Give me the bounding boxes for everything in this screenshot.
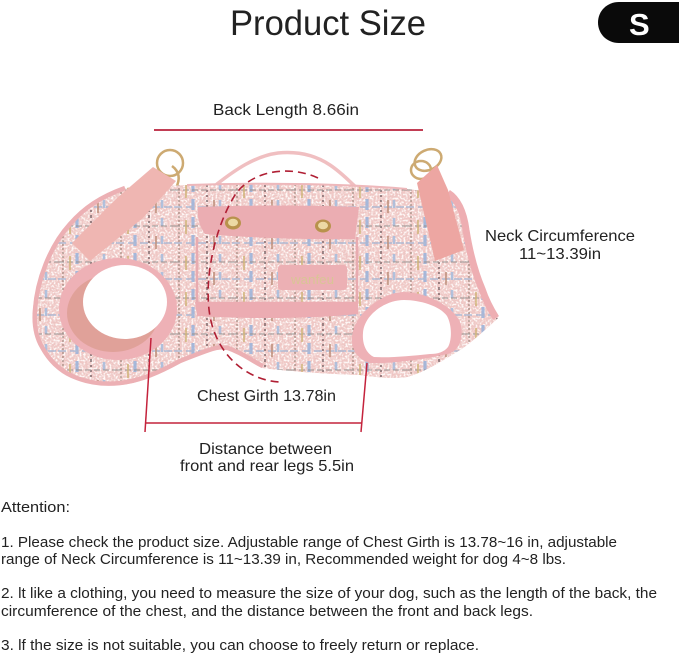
leg distance label xyxy=(180,441,354,475)
title: Product Size xyxy=(230,4,426,43)
leg distance bracket xyxy=(145,338,367,432)
piping: left edge and bottom xyxy=(35,188,263,384)
back length line xyxy=(154,129,423,131)
left adjuster strap xyxy=(72,167,176,261)
handle strap xyxy=(217,152,358,189)
pocket xyxy=(195,206,359,318)
attention notes: 3. lf the size is not suitable, you can choose to freely return or replace. xyxy=(1,638,479,654)
attention notes: 2. lt like a clothing, you need to measure the size of your dog, such as the length of the back, the xyxy=(1,586,657,602)
attention notes: circumference of the chest, and the distance between the front and back legs. xyxy=(1,604,533,620)
chest girth label: Chest Girth 13.78in xyxy=(197,388,336,405)
piping: top and neck edge xyxy=(187,184,407,189)
pocket side seams xyxy=(197,237,357,303)
size badge: S: S xyxy=(629,7,650,42)
neck circumference label xyxy=(485,228,635,263)
neck circumference label: 11~13.39in xyxy=(519,246,601,263)
back length label: Back Length 8.66in xyxy=(213,102,359,119)
chest girth dashed curve xyxy=(208,171,318,382)
left D-ring xyxy=(157,150,183,188)
pocket flap xyxy=(198,206,359,239)
attention notes xyxy=(1,500,657,654)
attention notes: range of Neck Circumference is 11~13.39 in, Recommended weight for dog 4~8 lbs. xyxy=(1,552,566,568)
pocket bottom band xyxy=(195,302,358,318)
right adjuster strap xyxy=(417,165,464,261)
brand label xyxy=(278,265,347,290)
attention notes: 1. Please check the product size. Adjustable range of Chest Girth is 13.78~16 in, adjustable xyxy=(1,535,617,551)
right D-rings xyxy=(411,145,445,179)
leg distance label: front and rear legs 5.5in xyxy=(180,458,354,475)
leg distance label: Distance between xyxy=(199,441,332,458)
attention notes: Attention: xyxy=(1,500,70,516)
rear leg hole xyxy=(59,258,177,360)
rivet: right xyxy=(315,220,331,232)
front leg hole xyxy=(352,292,462,363)
rivet: left xyxy=(225,216,241,230)
neck circumference label: Neck Circumference xyxy=(485,228,635,245)
brand label: wanfeu xyxy=(290,272,334,287)
harness body xyxy=(30,180,500,390)
size badge: S xyxy=(598,2,679,43)
illustration: pink tweed harness xyxy=(30,145,500,390)
